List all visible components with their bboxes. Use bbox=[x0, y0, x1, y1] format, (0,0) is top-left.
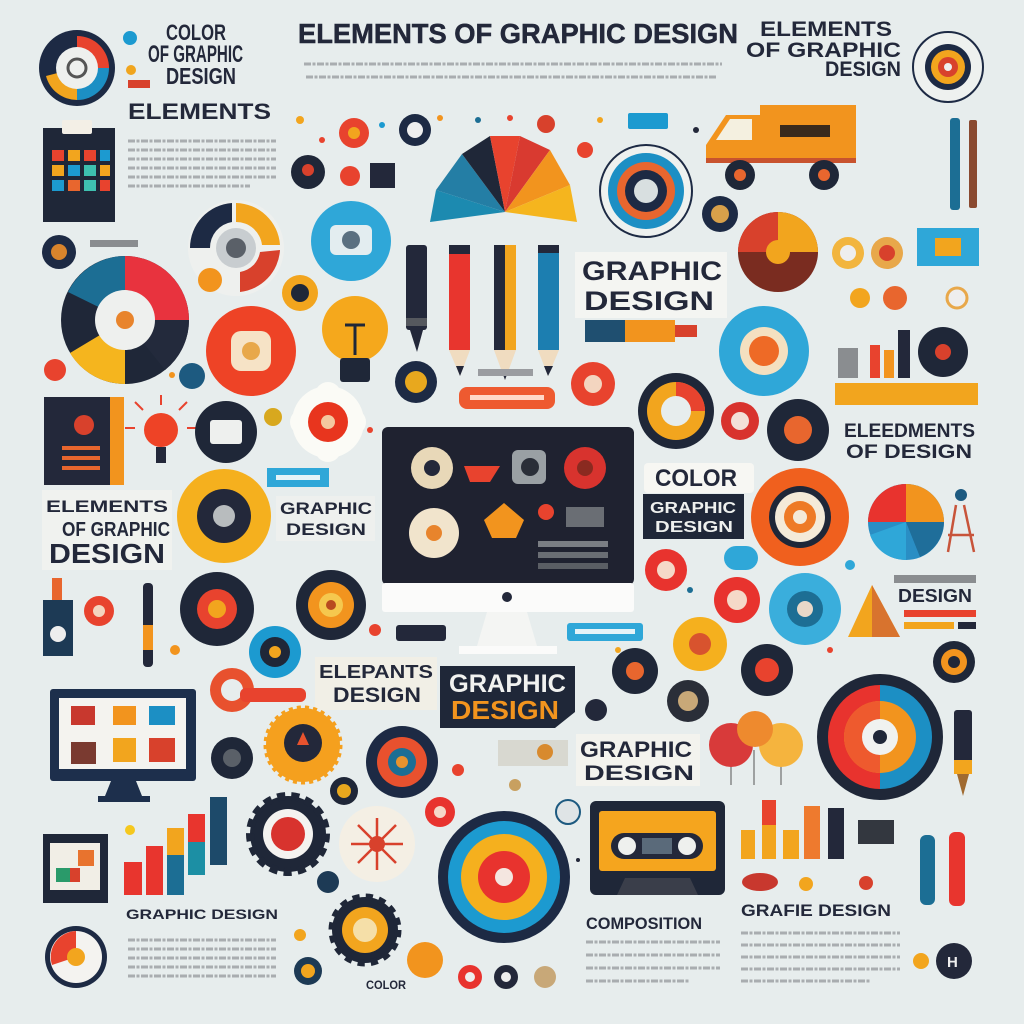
icon: light bulb bbox=[322, 296, 388, 382]
icon: dashed centre elements bbox=[452, 740, 568, 791]
icon: white flower bbox=[290, 382, 366, 462]
icon: balloons bbox=[709, 711, 803, 785]
icon: bulb with rays bbox=[125, 395, 197, 463]
chart: bars lower left bbox=[124, 797, 227, 895]
icon: blue gear bbox=[249, 626, 301, 678]
label: graphic design: DESIGN bbox=[584, 286, 714, 316]
icon: fan swatches bbox=[430, 136, 577, 222]
text: small label above pill bbox=[478, 369, 533, 376]
chart: pie right bbox=[868, 484, 944, 560]
icon: right ring bbox=[933, 641, 975, 683]
label: elements of graphic design left: OF GRAPHIC bbox=[62, 519, 170, 541]
icon: yellow circle centre right bbox=[673, 617, 727, 671]
heading: color of graphic design top left: COLOR bbox=[166, 20, 226, 45]
label: yellow strip bbox=[835, 383, 978, 405]
chart: donut bbox=[61, 256, 189, 384]
icon: monitor bbox=[382, 427, 634, 654]
icon: blue camera circle bbox=[311, 201, 391, 281]
icon: small target centre right bbox=[638, 373, 714, 449]
icon: target right of fan bbox=[600, 145, 692, 237]
label: graphic design small dark: GRAPHIC bbox=[280, 499, 372, 518]
icon: pen bbox=[143, 583, 153, 667]
icon: monitor lower left bbox=[50, 689, 196, 802]
icon: lower gear bbox=[332, 897, 398, 963]
icon: target lower centre-left bbox=[296, 570, 366, 640]
icon: dark circles centre right bbox=[585, 644, 793, 722]
text block: composition bbox=[586, 942, 720, 981]
label: elements design: DESIGN bbox=[333, 684, 421, 707]
icon: right tubes bbox=[920, 832, 965, 906]
icon: easel bbox=[948, 489, 974, 552]
icon: orange bar and circle bbox=[210, 668, 306, 712]
icon: target centre-left bbox=[366, 726, 438, 798]
label: graphic design: GRAPHIC bbox=[582, 256, 722, 286]
icon: color strip bbox=[904, 610, 976, 629]
icon: small centre-left target bbox=[44, 359, 437, 426]
scattered confetti dots bbox=[125, 115, 855, 941]
icon: yellow pencil bbox=[494, 245, 516, 380]
icon: sun bbox=[266, 708, 340, 782]
icon: triangle bbox=[848, 585, 900, 637]
heading: elements: ELEMENTS bbox=[128, 99, 271, 124]
icon: small left circle bbox=[42, 235, 138, 269]
label: elements of graphic design left: ELEMENTS bbox=[46, 497, 168, 516]
label: graphic design small dark: DESIGN bbox=[286, 520, 366, 539]
icon: compass circle bbox=[339, 806, 415, 882]
icon: yellow lens bbox=[177, 469, 271, 563]
chart: large target bbox=[817, 674, 943, 800]
heading: design right: DESIGN bbox=[898, 586, 972, 606]
heading: design right bbox=[894, 575, 976, 606]
label: graphic design lower: GRAPHIC bbox=[580, 737, 692, 762]
icon: blue flower circle bbox=[719, 306, 809, 396]
heading: top right: DESIGN bbox=[825, 58, 901, 81]
label: orange pill bbox=[459, 387, 555, 409]
heading: top right bbox=[746, 18, 901, 81]
label: graphic design dark: GRAPHIC bbox=[650, 500, 737, 517]
text block: lower right bbox=[741, 933, 900, 981]
label: color: COLOR bbox=[655, 465, 737, 492]
icon: bottom right circle: H bbox=[947, 954, 958, 971]
icon: bottom right circle bbox=[913, 943, 972, 979]
label: blue tag bbox=[267, 468, 329, 487]
label: graphic design centre: GRAPHIC bbox=[449, 670, 566, 698]
label: graphic design lower bbox=[576, 734, 700, 786]
icon: cassette bbox=[590, 801, 725, 895]
label: elements design bbox=[315, 657, 437, 710]
icon: left panel small bbox=[43, 578, 73, 656]
screen icons bbox=[409, 447, 608, 569]
heading: elements of design right: ELEEDMENTS bbox=[844, 421, 975, 442]
heading: elements of design right bbox=[844, 421, 975, 463]
chart: big target bbox=[438, 811, 570, 943]
label: color bottom: COLOR bbox=[366, 978, 406, 992]
icon: left book panel bbox=[44, 397, 124, 485]
icon: black tube bbox=[396, 625, 446, 641]
icon: pie right of truck bbox=[738, 212, 818, 292]
heading: elements of design right: OF DESIGN bbox=[846, 442, 972, 463]
icon: gear wheel bbox=[188, 200, 284, 296]
subtitle text lines bbox=[304, 64, 722, 77]
label: graphic design lower: DESIGN bbox=[584, 762, 694, 785]
label: graphic design dark: DESIGN bbox=[655, 519, 733, 536]
icon: image frame bbox=[43, 834, 108, 903]
icon: small circles lower bbox=[317, 777, 580, 893]
label: blue tag lower bbox=[567, 623, 643, 641]
icon: right cluster bbox=[832, 228, 979, 310]
icon: red button bbox=[206, 306, 296, 396]
icon: top left target bbox=[39, 30, 115, 106]
label: elements of graphic design left bbox=[42, 490, 172, 570]
icon: dark circle bottom left bbox=[180, 572, 254, 646]
icon: orange target bbox=[751, 468, 849, 566]
label: graphic design small dark bbox=[276, 496, 375, 541]
text block: lower left bbox=[128, 940, 276, 976]
icon: top right target bbox=[913, 32, 983, 102]
text block: elements bbox=[128, 141, 276, 186]
label: elements design: ELEPANTS bbox=[319, 662, 433, 682]
icon: bottom row circles bbox=[294, 942, 556, 989]
icon: dark camera circle bbox=[767, 399, 829, 461]
icon: small red shapes bbox=[742, 873, 873, 891]
heading: color of graphic design top left: DESIGN bbox=[166, 63, 236, 89]
heading: top right: OF GRAPHIC bbox=[746, 39, 901, 62]
heading: composition: COMPOSITION bbox=[586, 914, 702, 933]
label: elements of graphic design left: DESIGN bbox=[49, 538, 165, 569]
icon: right lower cluster bbox=[645, 546, 841, 645]
icon: small top left marks bbox=[123, 31, 150, 88]
icon: right pen bbox=[954, 710, 972, 796]
icon: dots row top centre bbox=[291, 113, 738, 232]
icon: blue pencil bbox=[538, 245, 559, 376]
title: ELEMENTS OF GRAPHIC DESIGN bbox=[298, 18, 738, 49]
heading: graphic design lower right: GRAFIE DESIGN bbox=[741, 901, 891, 920]
icon: small orange circle bbox=[282, 275, 318, 311]
chart: bars lower right bbox=[741, 800, 894, 859]
heading: color of graphic design top left bbox=[148, 20, 243, 89]
icon: bottom left target bbox=[45, 926, 107, 988]
chart: right small bars bbox=[838, 327, 968, 378]
icon: right pens bbox=[950, 118, 977, 210]
heading: top right: ELEMENTS bbox=[760, 18, 892, 41]
heading: color of graphic design top left: OF GRAPHIC bbox=[148, 41, 243, 68]
icon: small dark circle bbox=[211, 737, 253, 779]
label: graphic design centre bbox=[440, 666, 575, 728]
icon: truck bbox=[706, 105, 856, 190]
icon: red pencil bbox=[449, 245, 470, 376]
label: graphic design dark bbox=[643, 494, 744, 539]
icon: bar under label bbox=[585, 320, 697, 342]
icon: marker bbox=[406, 245, 427, 352]
icon: dark square circle bbox=[195, 401, 257, 463]
label: graphic design bbox=[575, 252, 727, 318]
icon: palette panel bbox=[43, 120, 115, 222]
label: graphic design centre: DESIGN bbox=[451, 695, 559, 725]
icon: red circle bbox=[84, 596, 114, 626]
icon: dark gear bbox=[250, 796, 326, 872]
heading: graphic design lower left: GRAPHIC DESIGN bbox=[126, 906, 278, 922]
icon: red badge bbox=[571, 362, 615, 406]
icon: red small circle bbox=[721, 402, 759, 440]
